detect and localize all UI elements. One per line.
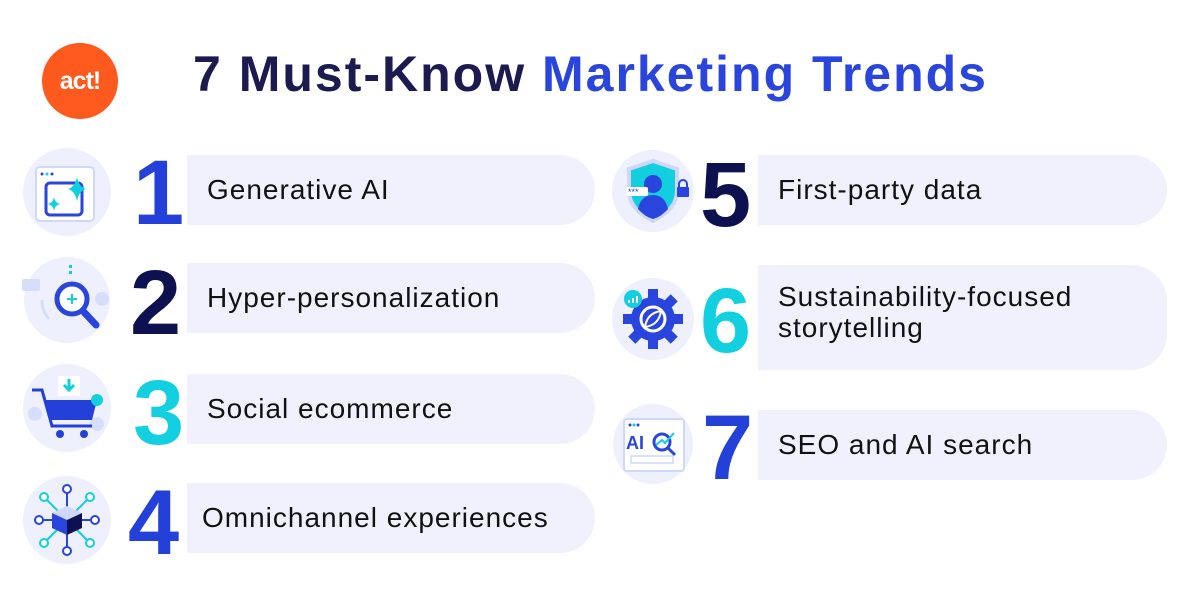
- bar 5: [758, 155, 1167, 225]
- bar 7: [758, 410, 1167, 480]
- bar 1: [187, 155, 595, 225]
- bar 5: First-party data: [778, 174, 982, 205]
- icon: hyper-personalization: [22, 257, 110, 343]
- bar 4: [187, 483, 595, 553]
- bar 4: Omnichannel experiences: [202, 502, 549, 533]
- number 2: 2: [130, 252, 179, 354]
- bar 3: Social ecommerce: [207, 393, 453, 424]
- icon: SEO and AI search: AI: [626, 433, 644, 453]
- number 6: 6: [700, 270, 749, 372]
- logo: [42, 43, 118, 119]
- bar 6: Sustainability-focused: [778, 280, 1072, 312]
- icon: first-party data: [612, 150, 694, 232]
- number 1: 1: [133, 142, 182, 244]
- icon: omnichannel: [23, 476, 111, 564]
- icon: social ecommerce: [23, 364, 111, 452]
- number 4: 4: [128, 472, 177, 574]
- icon: sustainability: [612, 278, 694, 360]
- number 5: 5: [700, 144, 749, 246]
- bar 6: storytelling: [778, 312, 924, 342]
- bar 7: SEO and AI search: [778, 429, 1033, 460]
- bar 2: [187, 263, 595, 333]
- icon: first-party data: ***: [628, 187, 639, 197]
- number 3: 3: [133, 362, 182, 464]
- icon: generative AI: [23, 148, 111, 236]
- bar 3: [187, 374, 595, 444]
- number 7: 7: [702, 397, 751, 499]
- title: 7 Must-Know Marketing Trends: [193, 46, 988, 102]
- bar 6: [758, 265, 1167, 370]
- bar 1: Generative AI: [207, 174, 390, 205]
- logo: act!: [60, 66, 100, 94]
- icon: SEO and AI search: [613, 404, 693, 484]
- bar 2: Hyper-personalization: [207, 282, 500, 313]
